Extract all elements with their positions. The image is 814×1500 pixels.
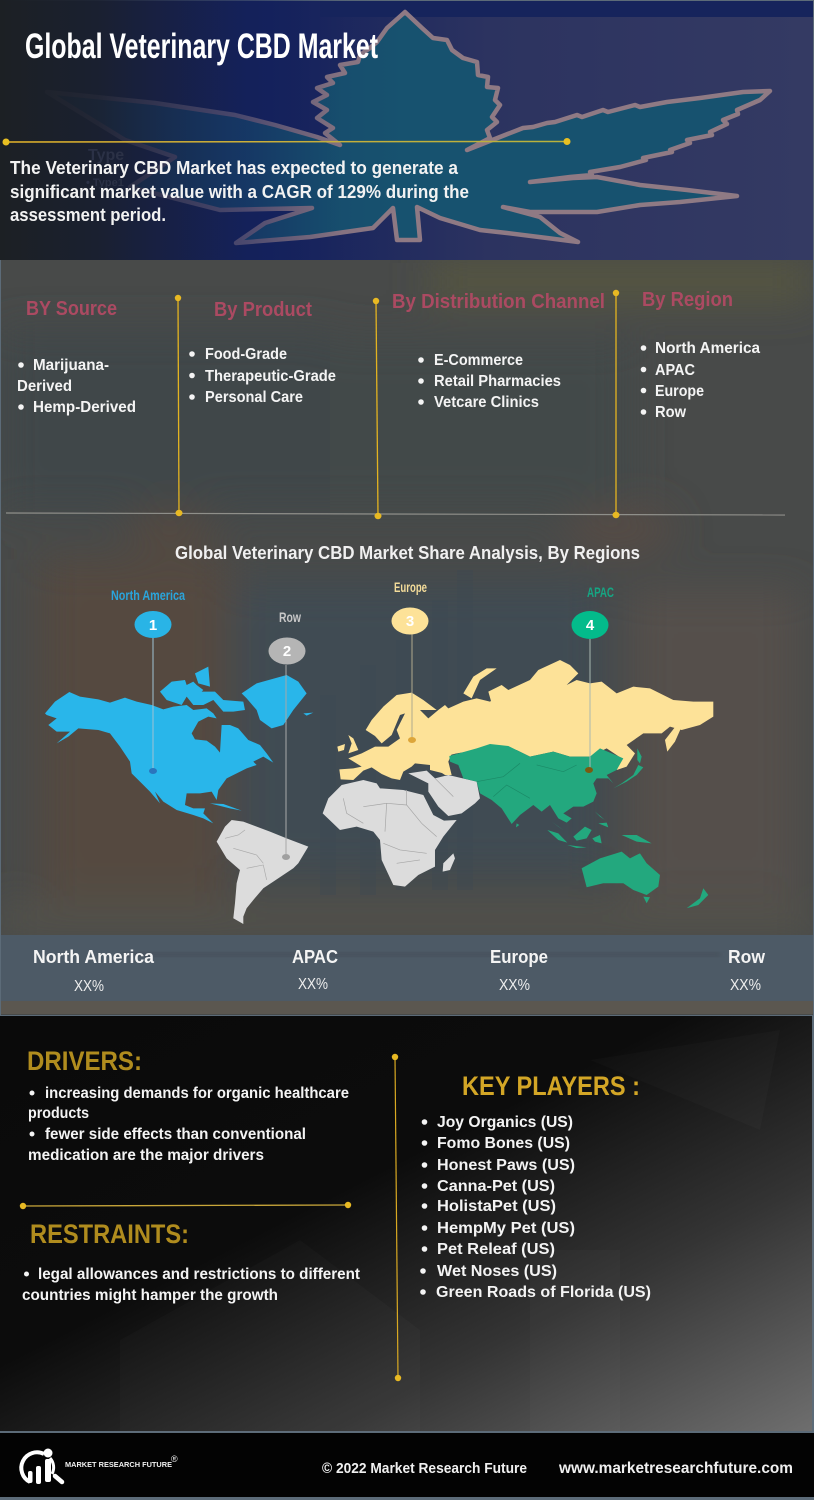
share: north america: XX% bbox=[74, 978, 104, 995]
copyright: © 2022 Market Research Future bbox=[322, 1460, 527, 1477]
list: source: Hemp-Derived bbox=[33, 399, 136, 416]
heading: chart title: Global Veterinary CBD Market Share Analysis, By Regions bbox=[175, 543, 640, 563]
map region: russia bbox=[430, 660, 713, 775]
share: row: Row bbox=[728, 947, 766, 967]
map region: north america bbox=[45, 667, 313, 823]
share: apac: XX% bbox=[298, 976, 328, 993]
list: key players: HolistaPet (US) bbox=[437, 1198, 556, 1215]
map region: europe bbox=[337, 683, 530, 780]
map region: asia pacific bbox=[449, 744, 708, 908]
list: key players: Joy Organics (US) bbox=[437, 1114, 573, 1131]
list: region: Europe bbox=[655, 383, 704, 400]
pin 2: row: 2 bbox=[283, 643, 291, 660]
title: Global Veterinary CBD Market bbox=[25, 27, 378, 66]
panel: segments bbox=[6, 289, 785, 519]
heading: restraints: RESTRAINTS: bbox=[30, 1219, 189, 1249]
logo text: MARKET RESEARCH FUTURE bbox=[65, 1460, 172, 1469]
panel: header bbox=[0, 0, 814, 260]
website: www.marketresearchfuture.com bbox=[558, 1460, 793, 1477]
list: product: Personal Care bbox=[205, 389, 303, 406]
map region: south america bbox=[217, 820, 308, 924]
chart: world map bbox=[45, 660, 713, 924]
text block: restraints: countries might hamper the growth bbox=[22, 1287, 278, 1304]
icon: logo bbox=[21, 1448, 62, 1484]
text block: drivers: fewer side effects than conventional bbox=[45, 1126, 306, 1143]
list: key players: Wet Noses (US) bbox=[437, 1263, 557, 1280]
text block: introduction: The Veterinary CBD Market has expected to generate a bbox=[10, 158, 459, 178]
share: europe: XX% bbox=[499, 977, 530, 994]
share: europe bbox=[490, 947, 548, 994]
list: key players: Green Roads of Florida (US) bbox=[436, 1284, 651, 1301]
pin 4: apac bbox=[572, 611, 608, 773]
list: region bbox=[641, 340, 760, 421]
list: product: Food-Grade bbox=[205, 346, 287, 363]
heading: drivers: DRIVERS: bbox=[27, 1046, 142, 1076]
map region: africa and middle east bbox=[323, 771, 480, 887]
icon: cannabis leaf bbox=[47, 12, 770, 243]
text block: introduction: assessment period. bbox=[10, 205, 166, 225]
list: distribution channel: E-Commerce bbox=[434, 352, 523, 369]
list: key players: Honest Paws (US) bbox=[437, 1157, 575, 1174]
pin label: row: Row bbox=[279, 609, 301, 625]
registered mark: ® bbox=[171, 1454, 178, 1464]
pin label: north america: North America bbox=[111, 587, 185, 603]
list: product: Therapeutic-Grade bbox=[205, 368, 336, 385]
heading: by region: By Region bbox=[642, 289, 733, 311]
share: europe: Europe bbox=[490, 947, 548, 967]
list: key players: HempMy Pet (US) bbox=[437, 1220, 575, 1237]
text block: introduction bbox=[10, 158, 469, 225]
share: row: XX% bbox=[730, 977, 761, 994]
panel: background segments and map bbox=[0, 260, 814, 1015]
list: key players bbox=[420, 1114, 651, 1301]
text block: drivers bbox=[28, 1085, 349, 1164]
list: source: Marijuana- bbox=[33, 357, 109, 374]
list: region: APAC bbox=[655, 362, 695, 379]
pin 3: europe bbox=[392, 608, 428, 743]
text block: restraints bbox=[22, 1266, 361, 1304]
list: distribution channel: Retail Pharmacies bbox=[434, 373, 561, 390]
share: north america bbox=[33, 947, 155, 995]
list: key players: Canna-Pet (US) bbox=[437, 1178, 555, 1195]
list: region: Row bbox=[655, 404, 687, 421]
list: key players: Pet Releaf (US) bbox=[437, 1241, 555, 1258]
heading: by distribution channel: By Distribution Channel bbox=[392, 291, 605, 313]
faint ghost text bbox=[86, 147, 124, 189]
text block: drivers: increasing demands for organic healthcare bbox=[45, 1085, 349, 1102]
share: apac: APAC bbox=[292, 947, 338, 967]
heading: by product: By Product bbox=[214, 299, 312, 321]
list: product bbox=[189, 346, 336, 406]
list: distribution channel: Vetcare Clinics bbox=[434, 394, 539, 411]
text block: drivers: products bbox=[28, 1105, 89, 1122]
list: key players: Fomo Bones (US) bbox=[437, 1135, 570, 1152]
panel: footer bbox=[0, 1433, 814, 1497]
list: region: North America bbox=[655, 340, 760, 357]
heading: by source: BY Source bbox=[26, 298, 117, 320]
share: north america: North America bbox=[33, 947, 155, 967]
pin label: europe: Europe bbox=[394, 579, 427, 595]
list: source bbox=[17, 357, 136, 416]
pin label: apac: APAC bbox=[587, 584, 614, 600]
pin 1: north america: 1 bbox=[149, 617, 157, 634]
divider: header line bbox=[2, 138, 570, 146]
pin 3: europe: 3 bbox=[406, 613, 414, 630]
text block: drivers: medication are the major drivers bbox=[28, 1147, 264, 1164]
pin 4: apac: 4 bbox=[586, 617, 595, 634]
share: row bbox=[728, 947, 766, 994]
text block: restraints: legal allowances and restrictions to different bbox=[38, 1266, 361, 1283]
pin 1: north america bbox=[134, 611, 172, 774]
share: apac bbox=[292, 947, 338, 993]
list: source: Derived bbox=[17, 378, 72, 395]
faint ghost text: Type bbox=[88, 147, 124, 164]
pin 2: row bbox=[268, 638, 306, 860]
heading: key players: KEY PLAYERS : bbox=[462, 1071, 640, 1101]
panel: drivers, restraints and key players bbox=[0, 1016, 812, 1432]
faint ghost text: • Type1 bbox=[86, 177, 124, 189]
list: distribution channel bbox=[418, 352, 561, 411]
panel: market share band bbox=[1, 935, 813, 1014]
text block: introduction: significant market value with a CAGR of 129% during the bbox=[10, 182, 469, 202]
